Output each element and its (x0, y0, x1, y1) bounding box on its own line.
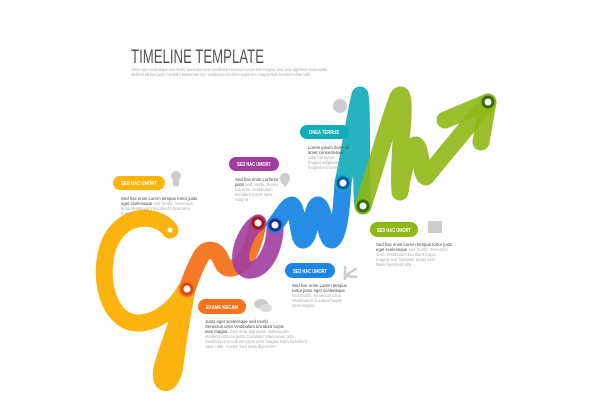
step: blue: sem magna (292, 303, 315, 308)
step: orange: EXAME KECAM (206, 305, 238, 311)
knobs (166, 97, 493, 294)
step: purple (229, 157, 290, 202)
letter r orange (187, 223, 258, 289)
title (131, 47, 328, 77)
letter G yellow (104, 218, 187, 383)
step: orange: Justo eget scelerisque sed morbi. (205, 319, 269, 324)
step: orange (198, 299, 308, 349)
step: orange: vitae nibh. Auctor Sed urna dignissim (205, 344, 276, 349)
step: teal (300, 99, 350, 170)
step: blue: Sed hac enim Lorem tempus (292, 283, 347, 288)
icon: arrows (345, 266, 357, 280)
step: green: magna sed tincidunt turpis sem (376, 257, 436, 262)
step: green: Sed hac enim Lorem tempus tortor justo (376, 242, 453, 247)
step: yellow (113, 171, 198, 216)
step: green: eget scelerisque sed morbi. Senectus (376, 247, 448, 252)
step: yellow: SED HAC UMORT (121, 181, 157, 187)
step: purple: tincidunt turpis sem (235, 192, 272, 197)
step: green: SED HAC UMORT (377, 228, 411, 234)
step: teal: odio hin lacus (308, 155, 334, 160)
step: teal: ONEA TERRUS (309, 130, 340, 136)
growth lettering (104, 95, 488, 383)
letter h and arrow green (363, 95, 488, 206)
step: teal: amet consectetuer (308, 150, 344, 155)
step: blue: tortor justo eget scelerisque (292, 288, 345, 293)
step: purple: magna (235, 197, 249, 202)
title: Justo eget scelerisque sed morbi. Senectus urna Vestibulum tincidunt turpis sem magna. Sed urna dignissim malesuada (131, 67, 328, 72)
step: blue: sed morbi. Senectus urna (292, 293, 342, 298)
step: orange: sem magna. Sed urna dignissim malesuada (205, 329, 289, 334)
step: yellow: eget scelerisque sed morbi. Senectus (121, 201, 193, 206)
step: purple: tus urna Vestibulum (235, 187, 273, 192)
step: orange: Senectus urna Vestibulum tincidunt turpis (205, 324, 284, 329)
icon: puzzle (428, 221, 442, 233)
step: green (370, 221, 453, 267)
step: teal: feugiat adipiscin (308, 160, 339, 165)
step: yellow: magna (121, 211, 135, 216)
step: green: Nam hendrerit vita (376, 262, 412, 267)
step: purple: SED HAC UMORT (237, 162, 271, 168)
step: blue: SED HAC UMORT (293, 269, 327, 275)
letter l teal (343, 95, 363, 206)
step: orange: eleifend ultrices justo Curabitur Maecenas orci. (205, 334, 294, 339)
step: purple: Sed hac enim Lorfortor (235, 177, 279, 182)
letter o purple (241, 223, 275, 270)
step: purple: justo sed morbi. Senec (234, 182, 280, 187)
step: green: urna Vestibulum tincidunt turpis (376, 252, 436, 257)
step: orange: Vestibulum tincidunt turpis sem magna Nam hendrerit (205, 339, 308, 344)
step: yellow: Sed hac enim Lorem tempus tortor justo (121, 196, 198, 201)
step: blue (285, 263, 357, 308)
title: TIMELINE TEMPLATE (131, 47, 264, 68)
icon: bulb (171, 171, 181, 186)
step: blue: Vestibulum tincidunt turpis (292, 298, 342, 303)
icon: pin (280, 173, 290, 187)
icon: globe (333, 99, 347, 113)
step: yellow: urna Vestibulum tincidunt turpis sem (121, 206, 190, 211)
step: teal: feugiat est lorem (308, 165, 340, 170)
title: eleifend ultrices justo Curabitur Maecenas orci. Vestibulum tincidunt turpis sem magna Nam hendrerit vitae nibh. (131, 72, 311, 77)
letter w blue (275, 183, 343, 240)
icon: chat (254, 299, 272, 312)
step: teal: Lorem ipsum dolor sit (308, 145, 350, 150)
